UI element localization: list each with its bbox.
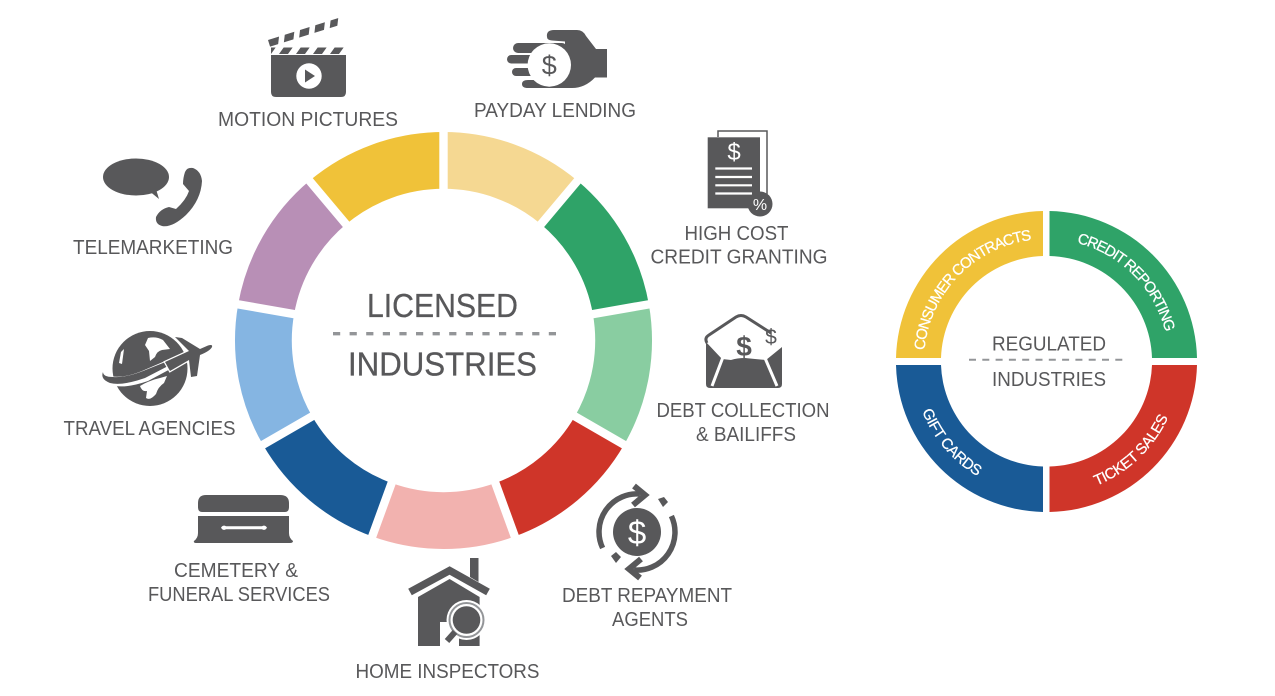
label: debt collection and bailiffs: DEBT COLLECTION	[656, 400, 830, 422]
icon: casket	[194, 495, 293, 543]
center title: licensed industries	[333, 287, 557, 382]
segment: travel agencies	[235, 304, 312, 445]
label: debt repayment agents: DEBT REPAYMENT	[562, 585, 732, 607]
label: cemetery and funeral services: CEMETERY &	[174, 560, 299, 582]
icon: loan document: %	[753, 197, 767, 214]
icon: debt repayment cycle	[599, 486, 675, 578]
label: cemetery and funeral services: FUNERAL SERVICES	[148, 584, 330, 606]
icon: loan document: $	[727, 139, 741, 166]
label: travel agencies: TRAVEL AGENCIES	[64, 418, 236, 440]
segment: debt collection	[575, 304, 652, 445]
segment: debt repayment	[495, 416, 624, 536]
icon: envelope with money: $	[765, 326, 777, 349]
licensed industries ring	[235, 128, 652, 549]
icon: house with magnifier	[410, 558, 488, 646]
center title: licensed industries: LICENSED	[367, 287, 518, 324]
center title: regulated industries: INDUSTRIES	[992, 368, 1106, 391]
segment: payday lending	[444, 132, 578, 224]
label: debt repayment agents: AGENTS	[612, 609, 688, 631]
segment: credit reporting	[1050, 211, 1197, 358]
label: home inspectors: HOME INSPECTORS	[356, 661, 540, 683]
center title: licensed industries: INDUSTRIES	[348, 346, 537, 382]
icon: hand with coin	[507, 30, 607, 88]
icon: envelope with money: $	[736, 331, 752, 362]
segment: cemetery	[263, 416, 392, 536]
icon: envelope with money	[706, 316, 782, 388]
segment: consumer contracts	[896, 211, 1043, 358]
segment: gift cards	[896, 365, 1043, 512]
segment: telemarketing	[238, 181, 346, 314]
label: credit reporting: CREDIT REPORTING	[1078, 234, 1174, 331]
label: cemetery and funeral services	[148, 560, 330, 606]
label: debt collection and bailiffs	[656, 400, 830, 446]
icon: globe and plane	[102, 331, 212, 406]
label: motion pictures: MOTION PICTURES	[218, 109, 398, 131]
segment: home inspectors	[372, 483, 515, 549]
label: debt repayment agents	[562, 585, 732, 631]
icon: clapperboard	[268, 16, 346, 97]
regulated industries ring	[896, 211, 1197, 512]
icon: debt repayment cycle: $	[628, 514, 646, 551]
label: gift cards: GIFT CARDS	[924, 409, 982, 475]
label: consumer contracts: CONSUMER CONTRACTS	[914, 230, 1031, 350]
label: payday lending: PAYDAY LENDING	[474, 100, 636, 122]
icon: loan document	[708, 131, 772, 216]
label: ticket sales: TICKET SALES	[1092, 414, 1167, 484]
label: telemarketing: TELEMARKETING	[73, 237, 233, 259]
center title: regulated industries: REGULATED	[992, 332, 1106, 356]
icon: hand with coin: $	[542, 50, 557, 80]
label: high cost credit granting: CREDIT GRANTING	[650, 246, 828, 268]
label: high cost credit granting	[650, 223, 828, 268]
label: debt collection and bailiffs: & BAILIFFS	[696, 424, 796, 446]
icon: speech bubble and phone	[103, 158, 202, 226]
center title: regulated industries	[969, 332, 1128, 391]
segment: ticket sales	[1050, 365, 1197, 512]
segment: motion pictures	[309, 132, 444, 224]
label: high cost credit granting: HIGH COST	[684, 223, 788, 245]
segment: high cost credit	[541, 181, 649, 314]
